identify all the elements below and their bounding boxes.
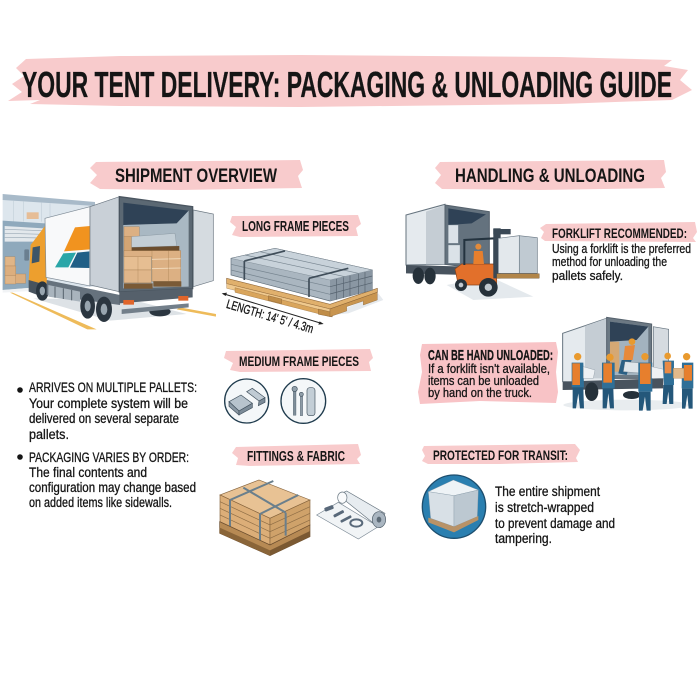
wrapped load (498, 236, 519, 273)
illustration: crew hand unloading truck (563, 317, 693, 411)
callout: forklift recommended (540, 222, 697, 283)
label: fittings and fabric: FITTINGS & FABRIC (247, 449, 345, 465)
worker 4 (663, 353, 674, 404)
bullet list (17, 380, 197, 510)
shadow (33, 298, 187, 321)
bullet: packaging varies by order: The final contents and (29, 465, 147, 480)
cargo interior (119, 197, 193, 292)
icon: medium frame brackets (225, 379, 269, 423)
callout: forklift recommended: method for unloading the (552, 254, 667, 269)
dimension arrow (223, 294, 322, 324)
road markings (10, 293, 97, 329)
text: stretch wrap explanation: tampering. (495, 531, 552, 546)
worker 3 (638, 353, 667, 411)
text: stretch wrap explanation: to prevent damage and (495, 516, 615, 531)
illustration: fabric roll and hardware (317, 491, 386, 539)
icon: stretch-wrapped pallet (422, 475, 486, 538)
label: protected for transit (422, 444, 580, 464)
label: long frame pieces: LONG FRAME PIECES (242, 218, 349, 235)
bullet: arrives on multiple pallets: delivered on several separate (29, 411, 179, 426)
illustration: delivery truck at warehouse (3, 194, 216, 329)
open right door (193, 210, 213, 287)
heading: handling and unloading: HANDLING & UNLOADING (455, 166, 645, 187)
forklift (455, 228, 511, 297)
text: stretch wrap explanation (495, 484, 615, 546)
truck body (406, 204, 445, 265)
bullet: arrives on multiple pallets: ARRIVES ON MULTIPLE PALLETS: (29, 380, 197, 395)
heading: shipment overview: SHIPMENT OVERVIEW (115, 166, 277, 187)
callout: can be hand unloaded (418, 342, 558, 404)
illustration: forklift unloading truck (406, 204, 539, 300)
cab (24, 226, 49, 301)
worker 2 (602, 354, 615, 408)
label: fittings and fabric (232, 444, 361, 466)
cartons on pallets (124, 227, 181, 289)
bullet: packaging varies by order: on added items like sidewalls. (29, 495, 172, 510)
bullet: arrives on multiple pallets: Your complete system will be (29, 396, 188, 411)
heading: handling and unloading (435, 160, 666, 190)
text: stretch wrap explanation: is stretch-wrapped (495, 500, 594, 515)
bullet: arrives on multiple pallets: pallets. (29, 427, 69, 442)
label: protected for transit: PROTECTED FOR TRANSIT: (433, 447, 568, 463)
callout: can be hand unloaded: CAN BE HAND UNLOADED: (428, 347, 553, 364)
bullet: arrives on multiple pallets (17, 380, 197, 442)
label: long frame pieces (230, 215, 361, 237)
callout: can be hand unloaded: by hand on the truck. (428, 385, 532, 400)
bullet: packaging varies by order (17, 450, 196, 510)
length text: LENGTH: 14' 5' / 4.3m (225, 297, 315, 336)
worker in truck (618, 338, 645, 375)
text: stretch wrap explanation: The entire shipment (495, 484, 600, 499)
metal bundle (231, 248, 372, 301)
open side door (90, 197, 119, 292)
bullet: packaging varies by order: PACKAGING VARIES BY ORDER: (29, 450, 189, 465)
rear bumper (119, 289, 193, 303)
heading: shipment overview (90, 160, 303, 190)
callout: forklift recommended: pallets safely. (552, 268, 623, 283)
box side (45, 207, 90, 286)
bullet: packaging varies by order: configuration may change based (29, 480, 196, 495)
icon: medium frame poles (281, 379, 326, 423)
illustration: boxed pallet of fittings (220, 480, 310, 556)
pallet (227, 278, 377, 309)
worker 5 (673, 353, 693, 409)
worker 1 (572, 353, 595, 408)
callout: can be hand unloaded: items can be unloaded (428, 373, 539, 388)
callout: can be hand unloaded: If a forklift isn't available, (428, 361, 550, 376)
pallet under boxes (220, 522, 310, 556)
chassis and tanks (47, 280, 120, 305)
label: medium frame pieces (224, 349, 373, 372)
illustration: long frame pieces on pallet (222, 248, 383, 336)
warehouse (3, 194, 95, 293)
label: medium frame pieces: MEDIUM FRAME PIECES (239, 353, 359, 369)
